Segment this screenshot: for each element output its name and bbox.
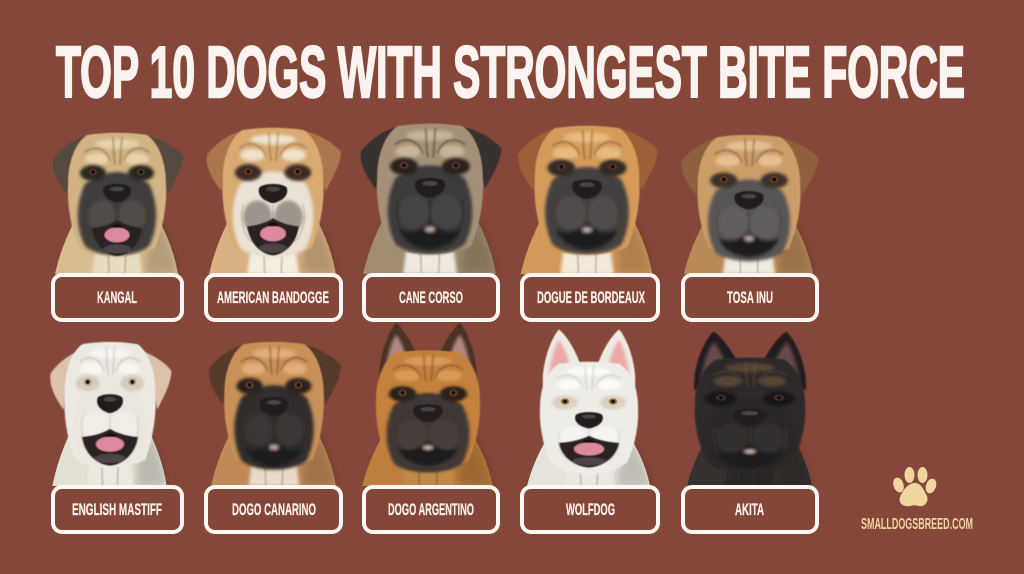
label: American Bandogge (206, 275, 341, 320)
panel: Dogo Canarino (206, 342, 341, 532)
icon: paw print (891, 467, 938, 506)
panel: Akita (683, 331, 817, 532)
label: Dogue de Bordeaux: DOGUE DE BORDEAUX (537, 289, 645, 307)
label: American Bandogge: AMERICAN BANDOGGE (217, 289, 329, 307)
label: Dogo Canarino (206, 487, 341, 532)
logo: paw and website (861, 467, 973, 533)
panel: Tosa Inu (681, 135, 818, 320)
panel: English Mastiff (50, 342, 182, 532)
dog portrait: Tosa Inu (681, 135, 818, 274)
panel: American Bandogge (206, 128, 341, 320)
dog portrait: Wolfdog (527, 329, 650, 486)
label: Wolfdog: WOLFDOG (566, 501, 615, 519)
label: Kangal: KANGAL (97, 289, 137, 307)
label: Dogo Argentino (364, 487, 498, 532)
label: English Mastiff (53, 487, 182, 532)
label: Akita: AKITA (735, 501, 764, 519)
label: Cane Corso: CANE CORSO (399, 289, 463, 307)
panel: Dogo Argentino (362, 323, 498, 532)
dog portrait: Akita (687, 331, 812, 486)
panel: Dogue de Bordeaux (518, 126, 658, 320)
label: Tosa Inu (683, 275, 817, 320)
label: Wolfdog (522, 487, 658, 532)
label: Dogo Argentino: DOGO ARGENTINO (388, 501, 474, 519)
dog portrait: Dogue de Bordeaux (518, 126, 658, 274)
dog portrait: American Bandogge (207, 128, 341, 274)
label: Dogo Canarino: DOGO CANARINO (232, 501, 316, 519)
label: Dogue de Bordeaux (522, 275, 658, 320)
dog portrait: Dogo Argentino (362, 323, 493, 486)
dog portrait: Dogo Canarino (209, 342, 341, 486)
label: Cane Corso (364, 275, 498, 320)
panel: Kangal (53, 133, 183, 320)
label: Kangal (53, 275, 182, 320)
label: English Mastiff: ENGLISH MASTIFF (72, 501, 162, 519)
panel: Wolfdog (522, 329, 658, 532)
panel: Cane Corso (361, 124, 501, 320)
label: Tosa Inu: TOSA INU (727, 289, 773, 307)
label: Akita (683, 487, 817, 532)
dog portrait: Cane Corso (361, 124, 501, 274)
dog portrait: Kangal (53, 133, 183, 274)
dog portrait: English Mastiff (50, 342, 171, 486)
